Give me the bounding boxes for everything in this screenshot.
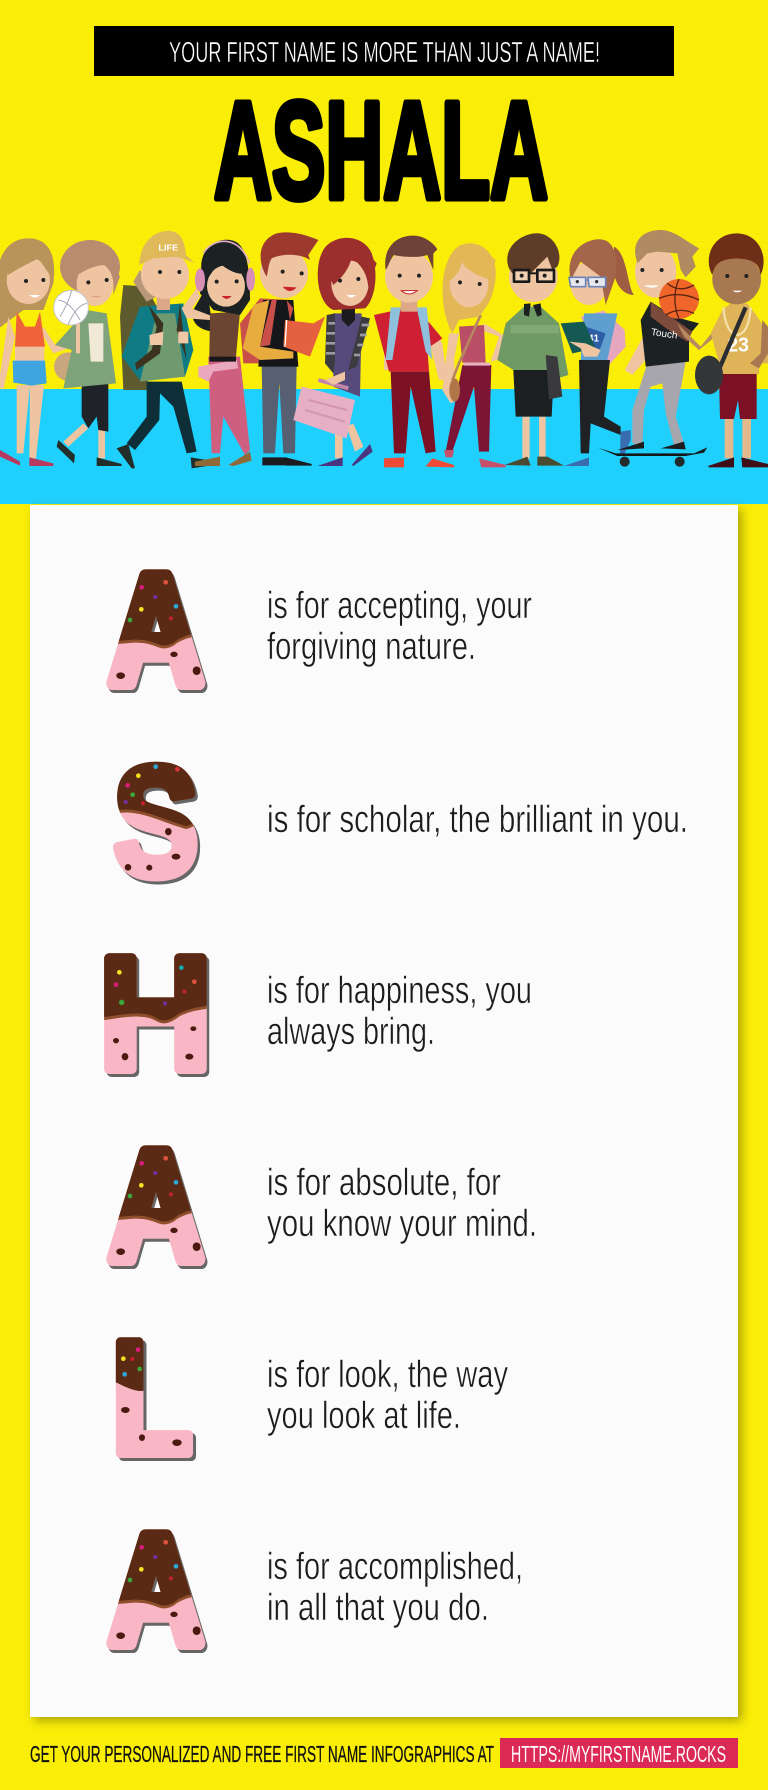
text: A: you know your mind. <box>267 1203 537 1245</box>
person: boy in yellow tank with shoulder bag <box>695 233 768 467</box>
letter A icon: A <box>109 543 203 716</box>
person: blonde girl <box>442 243 506 467</box>
text: A: forgiving nature. <box>267 626 476 668</box>
person: girl in purple vest with pink bag <box>293 238 377 466</box>
person: skater with basketball <box>598 230 717 467</box>
letter H icon: H <box>98 924 212 1104</box>
letter L icon: L <box>111 1308 193 1488</box>
row 4: letter A <box>109 1119 537 1295</box>
row 2: letter S <box>114 735 688 911</box>
text: L <box>267 1354 508 1437</box>
text: H: is for happiness, you <box>267 970 532 1012</box>
text: H: always bring. <box>267 1011 435 1053</box>
person: hiker with cap and backpack <box>117 231 207 468</box>
letter A icon <box>106 1145 208 1269</box>
person: girl with ponytail and tablet <box>561 239 634 466</box>
letter S icon: S <box>114 735 198 908</box>
panel: white card <box>30 505 738 1717</box>
text: L: is for look, the way <box>267 1354 508 1396</box>
person: girl with volleyball <box>54 240 122 466</box>
letter L icon: L <box>114 1311 196 1491</box>
text: A <box>267 1162 537 1245</box>
letter H icon: H <box>101 927 215 1107</box>
letter A icon: A <box>109 1503 203 1676</box>
letter L icon: L <box>111 1308 193 1488</box>
text: L: you look at life. <box>267 1395 461 1437</box>
person: boy with red book <box>240 232 325 466</box>
blue floor band <box>0 389 768 504</box>
letter A icon: A <box>109 1119 203 1292</box>
letter A icon: A <box>109 543 203 716</box>
person: boy in yellow tank with shoulder bag: 23 <box>727 334 749 357</box>
illustration: group of students <box>0 230 768 468</box>
white card shadow <box>34 509 742 1721</box>
letter A icon: A <box>111 546 205 719</box>
letter S icon: S <box>114 735 198 908</box>
letter L icon <box>116 1337 196 1461</box>
text: A: is for accepting, your <box>267 585 532 627</box>
letter A icon: A <box>109 1503 203 1676</box>
letter S icon: S <box>114 735 198 908</box>
letter H icon: H <box>98 924 212 1104</box>
text: H <box>267 970 532 1053</box>
person: hiker with cap and backpack: LIFE <box>158 243 179 253</box>
text: A <box>267 585 532 668</box>
letter H icon <box>104 953 210 1077</box>
person: girl with ponytail and tablet: 41 <box>588 334 600 345</box>
text: A <box>267 1546 523 1629</box>
letter A icon: A <box>109 1119 203 1292</box>
row 1: letter A <box>109 543 532 719</box>
person: boy with glasses <box>497 233 568 466</box>
person: girl with pink headphones <box>182 240 255 466</box>
letter S icon: S <box>116 738 201 911</box>
letter A icon <box>106 569 208 693</box>
person: skater with basketball: Touch <box>650 327 678 342</box>
letter S icon <box>113 762 200 884</box>
letter A icon: A <box>109 1503 203 1676</box>
row 6: letter A <box>106 1529 520 1653</box>
row 3: letter H <box>98 924 532 1107</box>
letter A icon: A <box>111 1122 205 1295</box>
header banner <box>94 26 674 76</box>
row 5: letter L <box>111 1308 508 1491</box>
text: A: is for accomplished, <box>267 1546 523 1588</box>
text: A: in all that you do. <box>267 1587 489 1629</box>
person: boy in red shirt <box>374 236 454 467</box>
letter A icon: A <box>111 1506 205 1679</box>
person: girl in orange top <box>0 238 80 466</box>
letter A icon: A <box>109 543 203 716</box>
letter A icon <box>106 1529 208 1653</box>
letter H icon: H <box>98 924 212 1104</box>
letter A icon: A <box>109 1119 203 1292</box>
text: A: is for absolute, for <box>267 1162 501 1204</box>
